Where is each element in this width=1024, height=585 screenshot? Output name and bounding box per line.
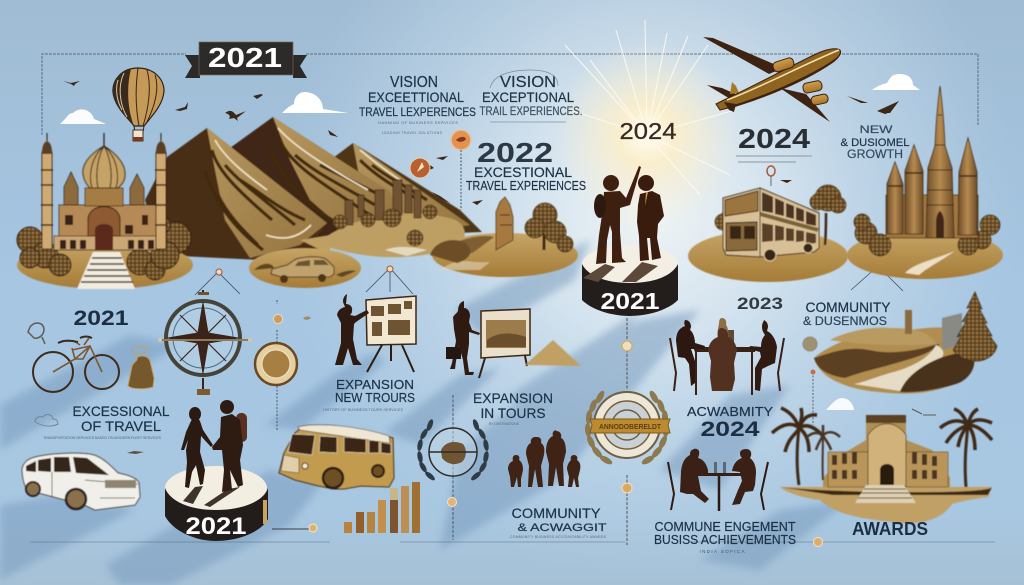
heading: new customer growth: NEW: [860, 124, 893, 136]
heading: 2022 exceptional travel experiences: EXCESTIONAL: [474, 164, 572, 180]
icon: bicycle: [33, 336, 119, 392]
icon: right tree: [810, 185, 846, 245]
island: tower and tree: [430, 197, 578, 277]
heading: expansion in tours: BY DESTINATIONS: [489, 422, 520, 426]
heading: community & acwaggit: COMMUNITY BUSINESS ACCOUNTABILITY AWARDS: [510, 535, 607, 539]
pin lines right: [810, 370, 936, 425]
meeting table bottom: [668, 449, 768, 511]
clouds: [60, 74, 920, 410]
headings: vision columns: EXCEETTIONAL: [368, 89, 464, 105]
year 2023: 2023: [737, 294, 783, 313]
icon: double decker bus: [723, 188, 819, 261]
heading: excessional of travel: [35, 403, 170, 440]
pin left of podium: [622, 483, 632, 493]
award badge: [584, 389, 670, 466]
building with palms: [772, 408, 992, 523]
podium: couple on top with 2021: 2021: [600, 288, 660, 314]
figure: woman: [181, 407, 213, 488]
figure: right: [732, 449, 756, 505]
figure: man with backpack: [212, 400, 247, 492]
heading: 2022 exceptional travel experiences: 2022: [477, 137, 553, 168]
heading: expansion in tours: [473, 390, 553, 426]
icon: left tree: [715, 205, 748, 245]
headings: vision columns: VISION: [390, 74, 438, 91]
landscape vignette: [803, 292, 997, 394]
church island: [847, 86, 1003, 279]
icon: gold van: [279, 425, 394, 489]
heading: commune engement business achievements: INDIA SOFICA: [700, 549, 744, 554]
heading: expansion in tours: EXPANSION: [473, 390, 553, 406]
figure: right: [749, 320, 777, 391]
figure: man in suit: [637, 175, 664, 261]
heading: 2022 exceptional travel experiences: [466, 137, 586, 193]
small bird: [127, 451, 144, 454]
heading: excessional of travel: OF TRAVEL: [81, 418, 161, 434]
figure: presenter: [335, 294, 369, 365]
heading: new customer growth: & DUSIOMEL: [840, 137, 910, 149]
icon: car: [271, 257, 334, 283]
headings: vision columns: HANNING OF BUSINESS SERVICES: [378, 120, 458, 125]
heading: community & dusenmos: [803, 299, 891, 328]
headings: vision columns: VISION: [500, 74, 556, 91]
heading: new customer growth: GROWTH: [847, 147, 903, 161]
heading: awards: AWARDS: [852, 519, 928, 539]
icon: palm right: [940, 409, 992, 487]
staircase: [77, 252, 135, 289]
heading: expansion new tours: NEW TROURS: [335, 390, 415, 405]
heading: excessional of travel: EXCESSIONAL: [72, 403, 170, 419]
heading: community & acwaggit: COMMUNITY: [512, 505, 601, 521]
sun year 2024: 2024: [620, 118, 677, 144]
icon: ring and bag: [28, 323, 154, 389]
podium: couple on top with 2021: [582, 166, 678, 316]
icon: tree: [525, 203, 573, 252]
heading: commune engement business achievements: BUSISS ACHIEVEMENTS: [654, 532, 796, 547]
heading: 2022 exceptional travel experiences: TRAVEL EXPERIENCES: [466, 178, 586, 193]
title ribbon: 2021: 2021: [208, 42, 282, 73]
heading: community & acwaggit: & ACWAGGIT: [518, 522, 607, 534]
heading: community & dusenmos: COMMUNITY: [806, 299, 891, 315]
heading: acwability 2024: 2024: [700, 418, 760, 441]
heading: expansion new tours: HISTORY OF BUSINESS TOURS SERVICES: [323, 408, 403, 412]
island: car: [249, 248, 361, 288]
heading: community & acwaggit: [510, 505, 607, 539]
year 2024: [736, 123, 812, 186]
frame line: [30, 54, 995, 542]
heading: acwability 2024: ACWABMITY: [687, 404, 773, 419]
airplane: [703, 37, 841, 122]
bar chart: [272, 482, 420, 533]
figure: centre: [708, 328, 737, 391]
minaret left: [41, 133, 53, 249]
heading: commune engement business achievements: COMMUNE ENGEMENT: [654, 519, 796, 534]
headings: vision columns: TRAIL EXPERIENCES.: [480, 104, 582, 118]
mountains: [145, 117, 482, 262]
sun rays: [552, 20, 742, 230]
icon: white minivan: [22, 453, 140, 510]
icon: compass: [158, 290, 252, 395]
icon: trees: [17, 215, 191, 280]
podium pin: [622, 318, 632, 545]
heading: expansion in tours: IN TOURS: [480, 405, 546, 421]
icon: medal: [255, 300, 311, 430]
island: mosque: [17, 133, 193, 289]
meeting table top: [670, 318, 784, 395]
heading: expansion new tours: EXPANSION: [336, 377, 414, 392]
bus island: [688, 185, 848, 282]
icon: pine: [953, 292, 997, 361]
icon: wreath globe: [416, 395, 490, 540]
icon: small palm: [806, 425, 840, 480]
heading: acwability 2024: [687, 404, 773, 441]
heading: community & dusenmos: & DUSENMOS: [803, 316, 887, 328]
headings: vision columns: [359, 70, 582, 135]
headings: vision columns: TRAVEL LEXPERENCES: [359, 105, 476, 119]
hot air balloon: [113, 68, 164, 141]
podium: couple with 2021: 2021: [186, 513, 246, 540]
minaret right: [155, 133, 167, 249]
timeline pin: [814, 538, 822, 546]
figure: man pointing: [594, 166, 641, 264]
year 2024: 2024: [738, 123, 810, 154]
presenter and board: [335, 294, 416, 372]
silhouette group: community: [508, 430, 580, 487]
hills and ruins: [300, 180, 465, 257]
headings: vision columns: LEADING TRAVEL SOLUTIONS: [382, 131, 443, 135]
headings: vision columns: EXCEPTIONAL: [482, 89, 574, 105]
heading: expansion new tours: [323, 377, 415, 412]
year 2021 left: 2021: [74, 307, 129, 330]
figure: left: [680, 449, 709, 503]
heading: new customer growth: [840, 124, 910, 161]
figure: woman: [450, 301, 480, 375]
heading: commune engement business achievements: [654, 519, 796, 554]
woman and board: [446, 301, 581, 378]
podium: couple with 2021: [165, 400, 268, 541]
icon: palm left: [772, 408, 823, 485]
birds: [63, 81, 899, 205]
map pins: [195, 130, 903, 295]
figure: left: [676, 320, 705, 386]
title ribbon: 2021: [185, 42, 307, 78]
award badge: ANNODOBERELDT: [599, 422, 661, 431]
heading: excessional of travel: TRANSPORTATION SERVICES BASED ON MODERN FLEET SERVICES: [43, 436, 161, 440]
